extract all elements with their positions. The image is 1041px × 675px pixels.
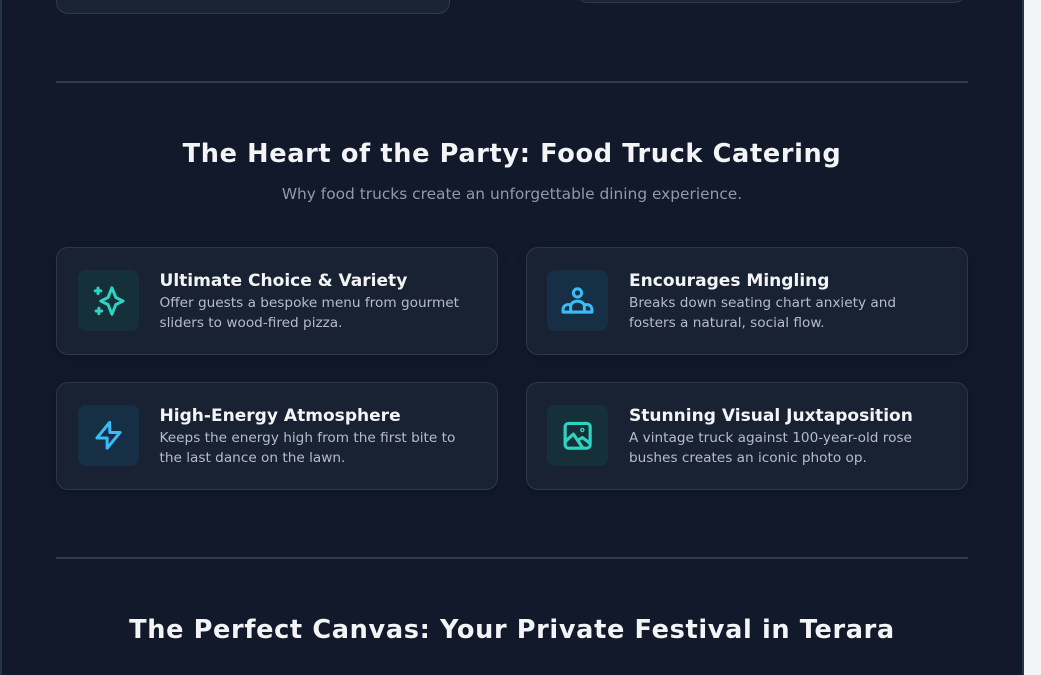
card description bbox=[160, 294, 459, 331]
card description: Keeps the energy high from the first bite to bbox=[160, 430, 455, 446]
card title: Stunning Visual Juxtaposition bbox=[629, 406, 913, 426]
card fragment: previous section right bbox=[576, 0, 966, 3]
card description bbox=[629, 294, 896, 331]
icon: sparkles bbox=[78, 270, 139, 331]
card fragment: previous section left bbox=[56, 0, 450, 14]
card title: Encourages Mingling bbox=[629, 271, 829, 291]
icon: people bbox=[547, 270, 608, 331]
card: stunning visual juxtaposition bbox=[526, 382, 968, 490]
icon: lightning bolt bbox=[78, 405, 139, 466]
card description: Breaks down seating chart anxiety and bbox=[629, 294, 896, 310]
heading: food truck catering: The Heart of the Party: Food Truck Catering bbox=[183, 139, 841, 169]
card description: Offer guests a bespoke menu from gourmet bbox=[160, 294, 459, 310]
card: ultimate choice and variety bbox=[56, 247, 498, 354]
card description bbox=[160, 430, 455, 466]
heading: the perfect canvas: The Perfect Canvas: Your Private Festival in Terara bbox=[129, 615, 895, 645]
subheading: Why food trucks create an unforgettable dining experience. bbox=[282, 185, 742, 203]
card description bbox=[629, 430, 912, 466]
card description: bushes creates an iconic photo op. bbox=[629, 450, 867, 466]
card title: Ultimate Choice & Variety bbox=[160, 271, 407, 291]
card description: A vintage truck against 100-year-old rose bbox=[629, 430, 912, 446]
card title: High-Energy Atmosphere bbox=[160, 406, 401, 426]
card description: fosters a natural, social flow. bbox=[629, 315, 825, 331]
card: high-energy atmosphere bbox=[56, 382, 498, 490]
card description: sliders to wood-fired pizza. bbox=[160, 315, 342, 331]
icon: image bbox=[547, 405, 608, 466]
card description: the last dance on the lawn. bbox=[160, 450, 345, 466]
card: encourages mingling bbox=[526, 247, 968, 354]
